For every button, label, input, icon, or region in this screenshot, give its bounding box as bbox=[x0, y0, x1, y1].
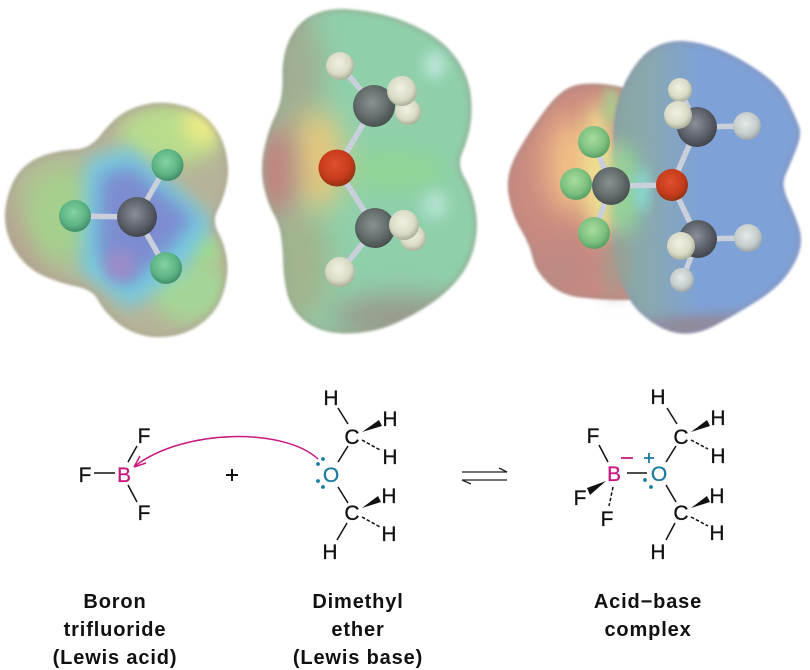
caption: acid-base complex bbox=[594, 591, 702, 641]
caption: dimethyl ether: ether bbox=[331, 619, 385, 641]
surface: front lobe, blue bbox=[611, 41, 801, 346]
structural formula: dimethyl ether: C bbox=[344, 426, 360, 449]
surface: back lobe, red bbox=[506, 82, 631, 302]
structural formula: acid-base complex: C bbox=[673, 502, 689, 525]
arrow: electron pair donation from oxygen to boron bbox=[134, 437, 318, 467]
structural formula: acid-base complex: F bbox=[601, 508, 613, 531]
caption: dimethyl ether bbox=[293, 591, 423, 669]
panel: dimethyl ether electrostatic potential model bbox=[253, 5, 477, 342]
surface: dimethyl ether potential map bbox=[253, 5, 477, 342]
structural formula: dimethyl ether: H bbox=[381, 523, 397, 546]
structural formula: boron trifluoride: B bbox=[117, 464, 131, 487]
structural formula: acid-base complex: C bbox=[673, 426, 689, 449]
surface: green-cyan transition between lobes bbox=[584, 140, 649, 297]
structural formula: dimethyl ether: C bbox=[344, 502, 360, 525]
structural formula: acid-base complex: F bbox=[574, 487, 586, 510]
structural formula: dimethyl ether: H bbox=[322, 541, 338, 564]
structural formula: acid-base complex: H bbox=[650, 386, 666, 409]
caption: boron trifluoride bbox=[53, 591, 177, 669]
structural formula: dimethyl ether: H bbox=[323, 387, 339, 410]
structural formula: dimethyl ether: H bbox=[382, 408, 398, 431]
ball-and-stick: dimethyl ether bbox=[318, 52, 426, 287]
structural formula: acid-base complex bbox=[574, 386, 726, 564]
structural formula: acid-base complex: H bbox=[709, 485, 725, 508]
caption: acid-base complex: complex bbox=[604, 619, 692, 641]
structural formula: dimethyl ether: O bbox=[323, 464, 339, 487]
structural formula: boron trifluoride bbox=[79, 425, 150, 525]
structural formula: acid-base complex: O bbox=[651, 463, 667, 486]
structural formula: acid-base complex: H bbox=[710, 445, 726, 468]
structural formula: boron trifluoride: F bbox=[138, 425, 150, 448]
structural formula: boron trifluoride: F bbox=[79, 464, 91, 487]
structural formula: dimethyl ether: H bbox=[381, 485, 397, 508]
equilibrium arrows bbox=[462, 468, 507, 484]
caption: acid-base complex: Acid−base bbox=[594, 591, 702, 613]
structural formula: acid-base complex: H bbox=[650, 541, 666, 564]
ball-and-stick: BF3 bbox=[59, 149, 184, 284]
caption: boron trifluoride: (Lewis acid) bbox=[53, 647, 177, 669]
panel: boron trifluoride electrostatic potential model bbox=[0, 103, 230, 337]
caption: dimethyl ether: (Lewis base) bbox=[293, 647, 423, 669]
caption: dimethyl ether: Dimethyl bbox=[312, 591, 404, 613]
caption: boron trifluoride: Boron bbox=[83, 591, 147, 613]
surface: BF3 potential map bbox=[0, 103, 230, 337]
plus sign bbox=[226, 469, 238, 481]
structural formula: acid-base complex: F bbox=[587, 425, 599, 448]
structural formula: dimethyl ether bbox=[316, 387, 398, 564]
ball-and-stick: acid-base complex bbox=[560, 78, 762, 292]
panel: acid-base complex electrostatic potential model bbox=[508, 41, 801, 346]
structural formula: acid-base complex: H bbox=[710, 407, 726, 430]
structural formula: boron trifluoride: F bbox=[138, 502, 150, 525]
caption: boron trifluoride: trifluoride bbox=[64, 619, 166, 641]
structural formula: acid-base complex: B bbox=[607, 463, 621, 486]
structural formula: dimethyl ether: H bbox=[382, 446, 398, 469]
structural formula: acid-base complex: H bbox=[709, 522, 725, 545]
